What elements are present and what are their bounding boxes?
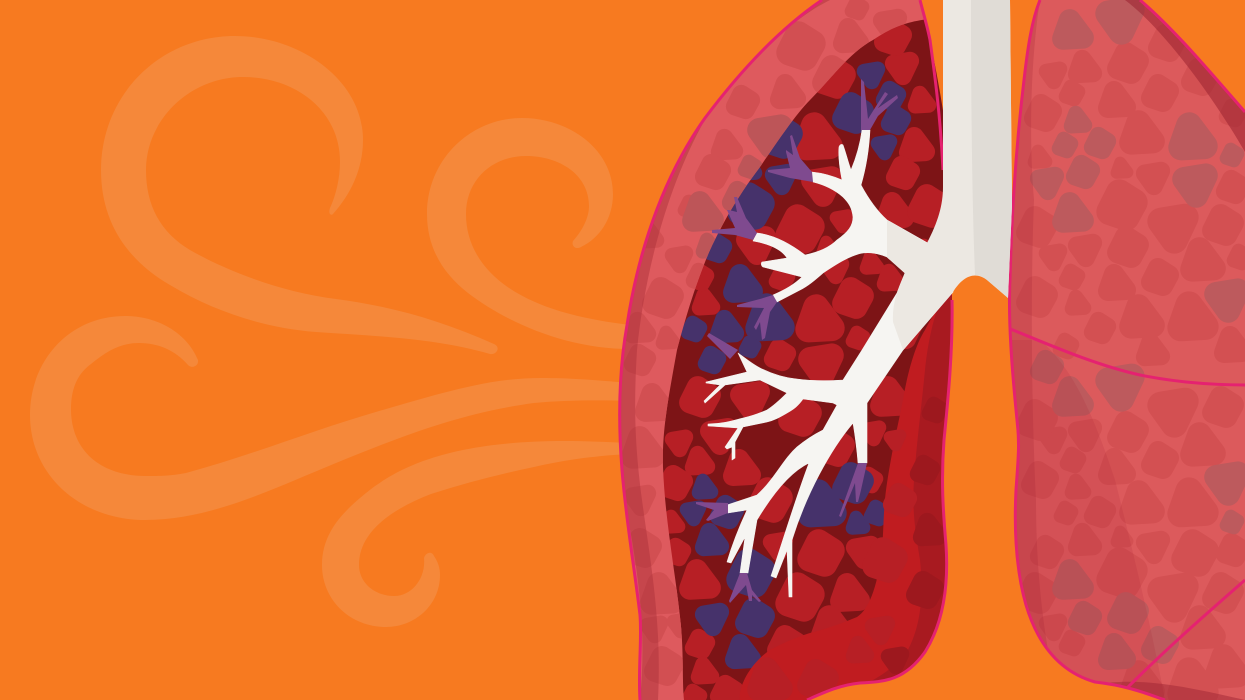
- left lung: [610, 0, 960, 700]
- front crescent alveoli: [632, 2, 898, 675]
- tip: eighth: [729, 573, 761, 603]
- darker outer crescent: [872, 294, 952, 680]
- fissure lines: [1008, 328, 1245, 690]
- alveoli: grey shaded: [1039, 10, 1238, 696]
- alveoli: pink: [1027, 34, 1245, 694]
- air swirls: [30, 36, 630, 627]
- middle crescent alveoli: [759, 245, 930, 690]
- tip: fifth: [707, 333, 738, 359]
- bottom shadow band: [1095, 682, 1245, 700]
- top right shadow band: [1125, 0, 1245, 152]
- tip: fourth: [737, 295, 777, 340]
- right lung fill: [1000, 0, 1245, 700]
- left lung outline: [620, 0, 952, 700]
- inner shadow band of right lung: [1011, 10, 1047, 646]
- outer crescent alveoli: [888, 404, 941, 667]
- tip: second: [768, 135, 813, 182]
- trachea: right shaded side: [971, 0, 1012, 298]
- right lung outline: [1009, 0, 1245, 700]
- swirl: lower: [322, 441, 630, 627]
- alveoli: red: [666, 28, 939, 700]
- tip: seventh: [696, 502, 728, 521]
- alveoli: purple oxygen sacs: [687, 69, 903, 660]
- tip: upper: [861, 79, 898, 130]
- lung outer shadow band: [616, 0, 830, 700]
- tip: third: [712, 197, 757, 240]
- left lung cavity: [662, 20, 943, 700]
- shaded cells seen through the front crescent: [693, 126, 781, 252]
- crescent pink cells: [632, 2, 898, 675]
- swirl: middle left: [30, 316, 630, 520]
- swirl: top left: [101, 36, 498, 354]
- tip: sixth: [839, 463, 867, 517]
- middle crescent of left lung: [740, 280, 960, 700]
- translucent front crescent: [610, 0, 930, 700]
- swirl: top right: [427, 118, 630, 349]
- bronchial tree: [704, 130, 953, 597]
- trachea and main bronchus: [887, 0, 1012, 350]
- purple bronchiole tips: [696, 79, 898, 603]
- lower shadow overlay: [1032, 340, 1162, 682]
- trachea: main light shape: [887, 0, 1012, 350]
- right lung: [1000, 0, 1245, 700]
